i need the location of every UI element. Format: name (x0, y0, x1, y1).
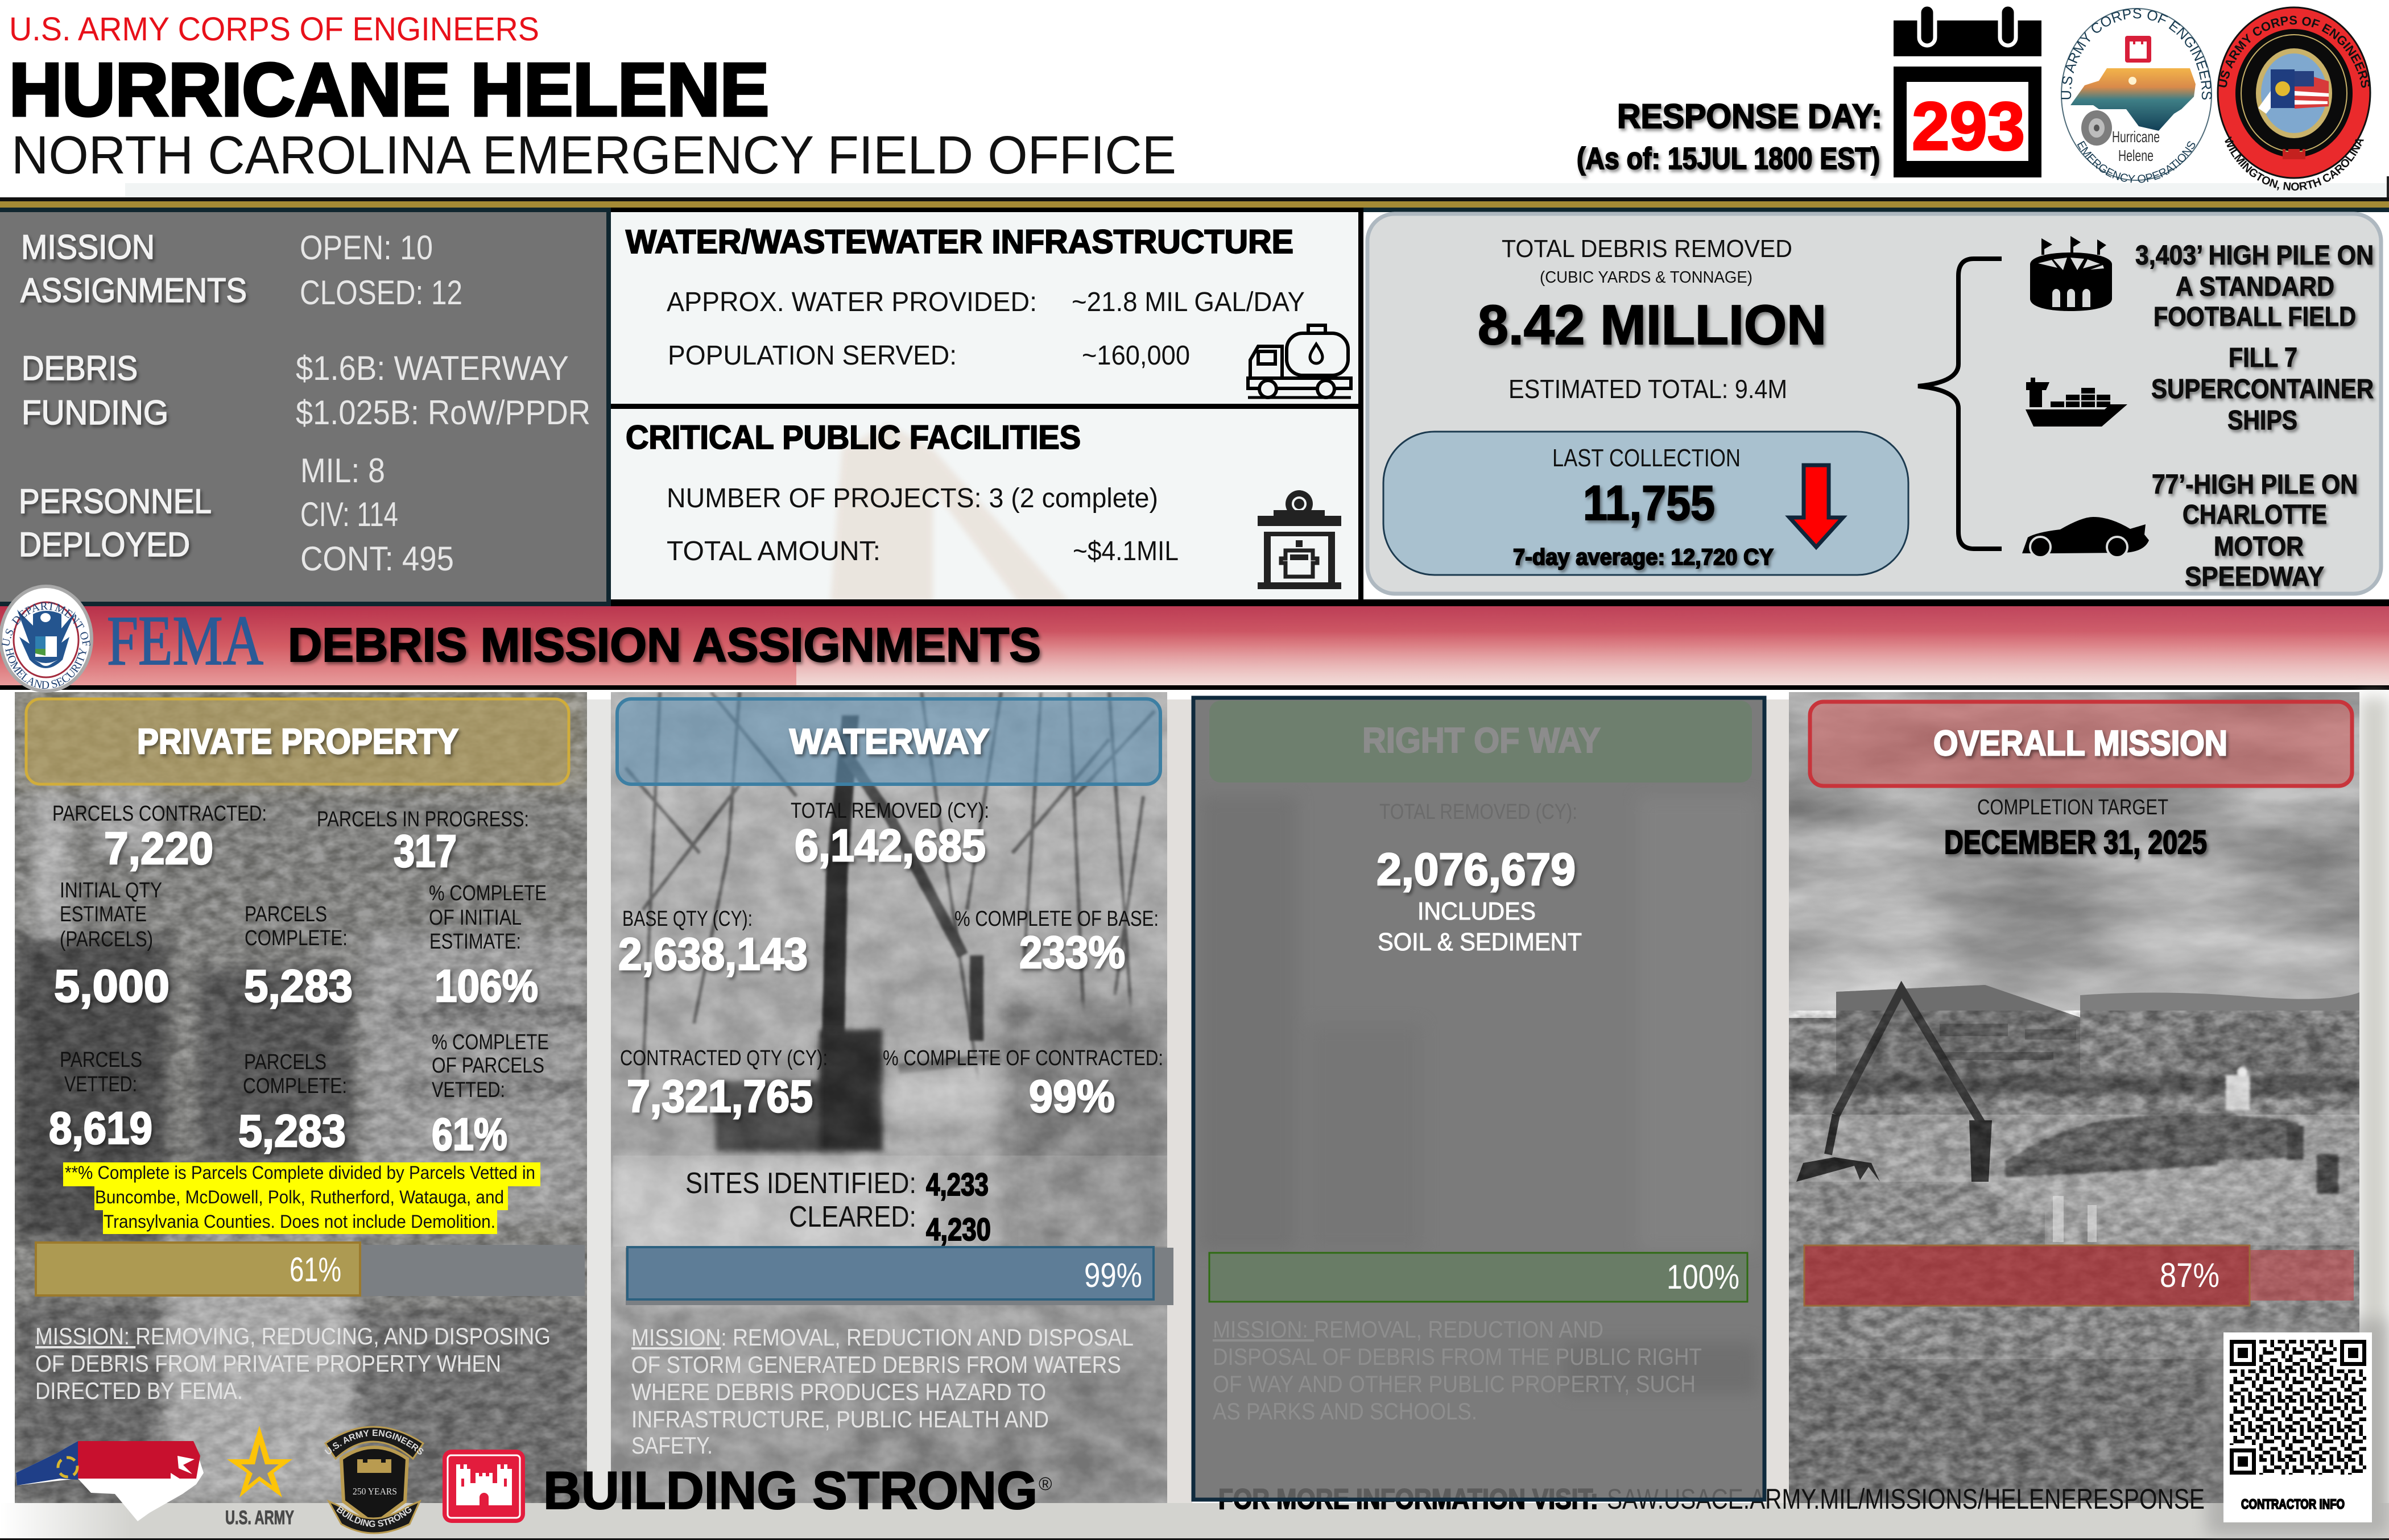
icon: calendar with day count: 293 (1912, 88, 2025, 164)
sites identified and cleared (685, 1166, 991, 1247)
progress bar: 99%: 99% (1084, 1256, 1142, 1294)
parcels stats: PARCELS CONTRACTED: (52, 802, 267, 826)
facility stats: TOTAL AMOUNT: (667, 536, 881, 566)
water stats: POPULATION SERVED: (668, 341, 957, 371)
callout: last collection: 11,755 (1583, 476, 1715, 531)
comparison text: FILL 7 (2229, 343, 2297, 373)
website link: SAW.USACE.ARMY.MIL/MISSIONS/HELENERESPONSE (1607, 1483, 2205, 1515)
mission assignments stat: OPEN: 10 (300, 229, 433, 267)
mission text: OF WAY AND OTHER PUBLIC PROPERTY, SUCH (1213, 1371, 1696, 1397)
sites identified and cleared: CLEARED: (789, 1200, 916, 1233)
parcels stats: % COMPLETE (432, 1030, 549, 1054)
total debris text: ESTIMATED TOTAL: 9.4M (1508, 374, 1787, 404)
mission assignments stat (20, 228, 462, 312)
waterway stats: 99% (1029, 1071, 1115, 1121)
debris funding stat: $1.6B: WATERWAY (296, 349, 569, 387)
progress bar: 61%: 61% (290, 1251, 341, 1289)
debris funding stat: DEBRIS (22, 349, 138, 387)
parcels stats: 5,283 (238, 1106, 346, 1156)
comparison text (2135, 241, 2374, 592)
parcels stats: 106% (435, 961, 538, 1011)
panel: right of way (1192, 696, 1766, 1501)
right of way stats: SOIL & SEDIMENT (1378, 928, 1582, 956)
callout: last collection (1383, 432, 1908, 575)
icon: 250 years engineers badge: BUILDING STRONG (334, 1505, 414, 1529)
panel: mission assignments, funding, personnel (0, 208, 611, 606)
icon: 250 years engineers badge: 250 YEARS (353, 1486, 397, 1497)
icon: U.S. Army star: U.S. ARMY (225, 1507, 294, 1529)
progress bar: 61% (35, 1243, 585, 1296)
arrow: down trend (1789, 465, 1843, 547)
FEMA wordmark: FEMA (107, 602, 263, 680)
response day text: (As of: 15JUL 1800 EST) (1577, 142, 1880, 176)
completion target (1944, 796, 2207, 861)
callout: highlighted footnote: Buncombe, McDowell, Polk, Rutherford, Watauga, and (95, 1187, 504, 1207)
mission text: DIRECTED BY FEMA. (35, 1377, 243, 1404)
parcels stats: COMPLETE: (245, 926, 348, 950)
mission text: INFRASTRUCTURE, PUBLIC HEALTH AND (631, 1406, 1049, 1433)
mission assignments stat: ASSIGNMENTS (20, 271, 247, 309)
personnel deployed stat (19, 452, 454, 578)
mission text: WHERE DEBRIS PRODUCES HAZARD TO (631, 1378, 1046, 1405)
heading button (1810, 702, 2352, 786)
main title: HURRICANE HELENE (9, 48, 769, 131)
parcels stats: 317 (394, 826, 457, 876)
debris funding stat: $1.025B: RoW/PPDR (296, 394, 590, 432)
heading button: PRIVATE PROPERTY (137, 722, 458, 761)
heading button: RIGHT OF WAY (1362, 721, 1601, 760)
photo: right of way background (1192, 696, 1766, 1501)
icon: DHS seal: U.S. DEPARTMENT OF (1, 602, 90, 646)
personnel deployed stat: MIL: 8 (300, 452, 385, 490)
sites identified and cleared: 4,233 (926, 1166, 989, 1202)
website link: FOR MORE INFORMATION VISIT: (1218, 1483, 1598, 1515)
parcels stats: VETTED: (64, 1073, 137, 1096)
parcels stats: 8,619 (49, 1103, 152, 1153)
panel: total debris removed (1363, 212, 2389, 599)
facility stats: NUMBER OF PROJECTS: 3 (2 complete) (667, 483, 1158, 514)
mission text: MISSION: REMOVAL, REDUCTION AND DISPOSAL (631, 1324, 1134, 1351)
total debris text: 8.42 MILLION (1478, 293, 1826, 356)
water stats: ~21.8 MIL GAL/DAY (1072, 287, 1305, 317)
icon: fire station (1258, 490, 1341, 589)
header band (0, 176, 2389, 212)
icon: Wilmington district seal: US ARMY CORPS OF ENGINEERS (2218, 16, 2369, 88)
parcels stats: OF PARCELS (432, 1054, 544, 1078)
completion target: COMPLETION TARGET (1977, 796, 2168, 819)
mission text: OF STORM GENERATED DEBRIS FROM WATERS (631, 1351, 1121, 1378)
comparison text: SHIPS (2227, 405, 2297, 436)
heading button: WATERWAY (790, 722, 989, 761)
slogan: building strong: ® (1039, 1473, 1052, 1494)
icon: U.S. Army star (225, 1426, 294, 1529)
icon: container ship (2026, 378, 2127, 427)
waterway stats: 6,142,685 (795, 820, 986, 871)
water stats: APPROX. WATER PROVIDED: (667, 287, 1037, 317)
mission text: SAFETY. (631, 1432, 713, 1459)
icon: DHS seal: HOMELAND SECURITY (2, 647, 90, 692)
parcels stats: VETTED: (432, 1078, 505, 1102)
icon: Hurricane Helene emergency operations logo: Helene (2118, 147, 2154, 164)
panel: water/wastewater and critical facilities (611, 208, 2389, 606)
parcels stats: 5,000 (54, 961, 170, 1011)
mission assignments stat: CLOSED: 12 (300, 274, 462, 312)
critical facilities heading: CRITICAL PUBLIC FACILITIES (626, 419, 1081, 456)
icon: DHS seal (0, 586, 93, 692)
waterway stats: 7,321,765 (627, 1071, 813, 1121)
progress bar: 87% (1804, 1245, 2354, 1306)
callout: highlighted footnote (63, 1162, 540, 1234)
icon: Wilmington district seal: WILMINGTON, NORTH CAROLINA (2225, 136, 2364, 191)
personnel deployed stat: PERSONNEL (19, 482, 212, 520)
sites identified and cleared: 4,230 (926, 1211, 991, 1247)
banner heading: DEBRIS MISSION ASSIGNMENTS (288, 618, 1041, 672)
water section heading: WATER/WASTEWATER INFRASTRUCTURE (626, 223, 1293, 260)
completion target: DECEMBER 31, 2025 (1944, 824, 2207, 861)
comparison text: 77’-HIGH PILE ON (2152, 470, 2358, 500)
parcels stats: PARCELS (245, 903, 327, 926)
icon: 250 years engineers badge (323, 1427, 425, 1533)
parcels stats: 5,283 (244, 961, 353, 1011)
waterway stats: % COMPLETE OF BASE: (954, 907, 1159, 931)
debris funding stat: FUNDING (22, 394, 168, 432)
total debris text: (CUBIC YARDS & TONNAGE) (1540, 268, 1753, 287)
parcels stats (49, 802, 549, 1160)
icon: calendar with day count (1894, 5, 2041, 177)
total debris text (1478, 235, 1826, 404)
photo: private property background (15, 692, 587, 1503)
brace (1918, 259, 2002, 549)
heading button (26, 699, 569, 784)
parcels stats: ESTIMATE: (429, 930, 521, 954)
parcels stats: PARCELS (244, 1050, 326, 1074)
parcels stats: % COMPLETE (429, 881, 547, 905)
callout: last collection: 7-day average: 12,720 CY (1513, 545, 1774, 570)
QR code: contractor info: CONTRACTOR INFO (2241, 1497, 2345, 1512)
icon: castle logo (443, 1450, 525, 1523)
response day text: RESPONSE DAY: (1617, 97, 1882, 135)
callout: last collection: LAST COLLECTION (1552, 444, 1741, 472)
facility stats (667, 483, 1179, 566)
mission text: MISSION: REMOVING, REDUCING, AND DISPOSING (35, 1323, 551, 1349)
debris funding stat (22, 349, 590, 432)
parcels stats: INITIAL QTY (60, 879, 162, 903)
icon: NC flag state map (16, 1441, 204, 1521)
total debris text: TOTAL DEBRIS REMOVED (1502, 235, 1792, 263)
QR code: contractor info (2207, 1319, 2389, 1535)
mission text: AS PARKS AND SCHOOLS. (1213, 1398, 1477, 1425)
mission text (35, 1323, 551, 1404)
callout: highlighted footnote: **% Complete is Parcels Complete divided by Parcels Vetted in (65, 1162, 535, 1183)
parcels stats: (PARCELS) (60, 928, 153, 951)
heading button: OVERALL MISSION (1933, 724, 2227, 763)
personnel deployed stat: CONT: 495 (300, 540, 454, 578)
waterway stats (618, 799, 1163, 1121)
mission assignments stat: MISSION (21, 228, 155, 266)
progress bar: 99% (626, 1247, 1173, 1305)
icon: Hurricane Helene emergency operations logo: U.S ARMY CORPS OF ENGINEERS (2061, 8, 2212, 100)
mission text: MISSION: REMOVAL, REDUCTION AND (1213, 1316, 1603, 1343)
website link (1218, 1483, 2205, 1515)
icon: Hurricane Helene emergency operations logo (2059, 6, 2214, 186)
callout: highlighted footnote: Transylvania Counties. Does not include Demolition. (104, 1211, 495, 1232)
icon: Hurricane Helene emergency operations logo: Hurricane (2112, 128, 2160, 146)
waterway stats: % COMPLETE OF CONTRACTED: (883, 1046, 1163, 1070)
water stats: ~160,000 (1082, 341, 1190, 371)
waterway stats: 233% (1019, 927, 1125, 978)
sites identified and cleared: SITES IDENTIFIED: (685, 1167, 916, 1200)
heading button (617, 699, 1160, 784)
parcels stats: PARCELS (60, 1048, 142, 1072)
progress bar: 100%: 100% (1667, 1258, 1739, 1296)
parcels stats: COMPLETE: (243, 1074, 347, 1098)
waterway stats: TOTAL REMOVED (CY): (791, 799, 989, 823)
personnel deployed stat: CIV: 114 (300, 495, 398, 533)
photo: waterway background (611, 692, 1167, 1503)
comparison text: A STANDARD (2176, 272, 2334, 302)
lower background (0, 690, 2389, 1540)
mission text: DISPOSAL OF DEBRIS FROM THE PUBLIC RIGHT (1213, 1343, 1702, 1370)
title block (9, 11, 1176, 185)
right of way stats: INCLUDES (1417, 897, 1536, 925)
parcels stats: 7,220 (104, 823, 213, 874)
heading button (1209, 701, 1752, 783)
right of way stats (1377, 800, 1582, 956)
banner: FEMA debris mission assignments (0, 602, 2389, 690)
icon: race car (2022, 517, 2149, 557)
mission text: OF DEBRIS FROM PRIVATE PROPERTY WHEN (35, 1350, 501, 1377)
subtitle: NORTH CAROLINA EMERGENCY FIELD OFFICE (11, 125, 1176, 185)
right of way stats: TOTAL REMOVED (CY): (1379, 800, 1577, 824)
comparison text: CHARLOTTE (2183, 500, 2327, 530)
right of way stats: 2,076,679 (1377, 844, 1576, 895)
panel: overall mission (1789, 692, 2389, 1535)
comparison text: FOOTBALL FIELD (2154, 302, 2356, 332)
mission text (631, 1324, 1134, 1459)
panel: private property (15, 692, 587, 1503)
parcels stats: 61% (432, 1109, 507, 1160)
parcels stats: PARCELS IN PROGRESS: (317, 808, 529, 831)
icon: 250 years engineers badge: U.S. ARMY ENGINEERS (323, 1429, 425, 1458)
icon: water truck (1248, 325, 1351, 398)
panel: waterway (611, 692, 1173, 1503)
response day text (1577, 97, 1882, 176)
slogan: building strong: BUILDING STRONG (543, 1460, 1038, 1520)
organisation line: U.S. ARMY CORPS OF ENGINEERS (9, 11, 539, 48)
parcels stats: OF INITIAL (429, 906, 522, 930)
water stats (667, 287, 1305, 371)
waterway stats: 2,638,143 (618, 929, 808, 979)
photo: overall mission background (1789, 692, 2359, 1503)
progress bar: 100% (1209, 1253, 1747, 1302)
waterway stats: BASE QTY (CY): (622, 907, 753, 931)
icon: Wilmington district seal (2215, 7, 2373, 193)
icon: stadium (2030, 236, 2112, 311)
comparison text: SPEEDWAY (2185, 562, 2324, 592)
mission text (1213, 1316, 1702, 1425)
personnel deployed stat: DEPLOYED (19, 525, 190, 564)
waterway stats: CONTRACTED QTY (CY): (620, 1046, 828, 1070)
facility stats: ~$4.1MIL (1073, 536, 1179, 566)
parcels stats: ESTIMATE (60, 903, 147, 926)
comparison text: MOTOR (2214, 532, 2304, 562)
icon: Hurricane Helene emergency operations logo: EMERGENCY OPERATIONS (2077, 141, 2196, 183)
progress bar: 87%: 87% (2160, 1256, 2219, 1294)
